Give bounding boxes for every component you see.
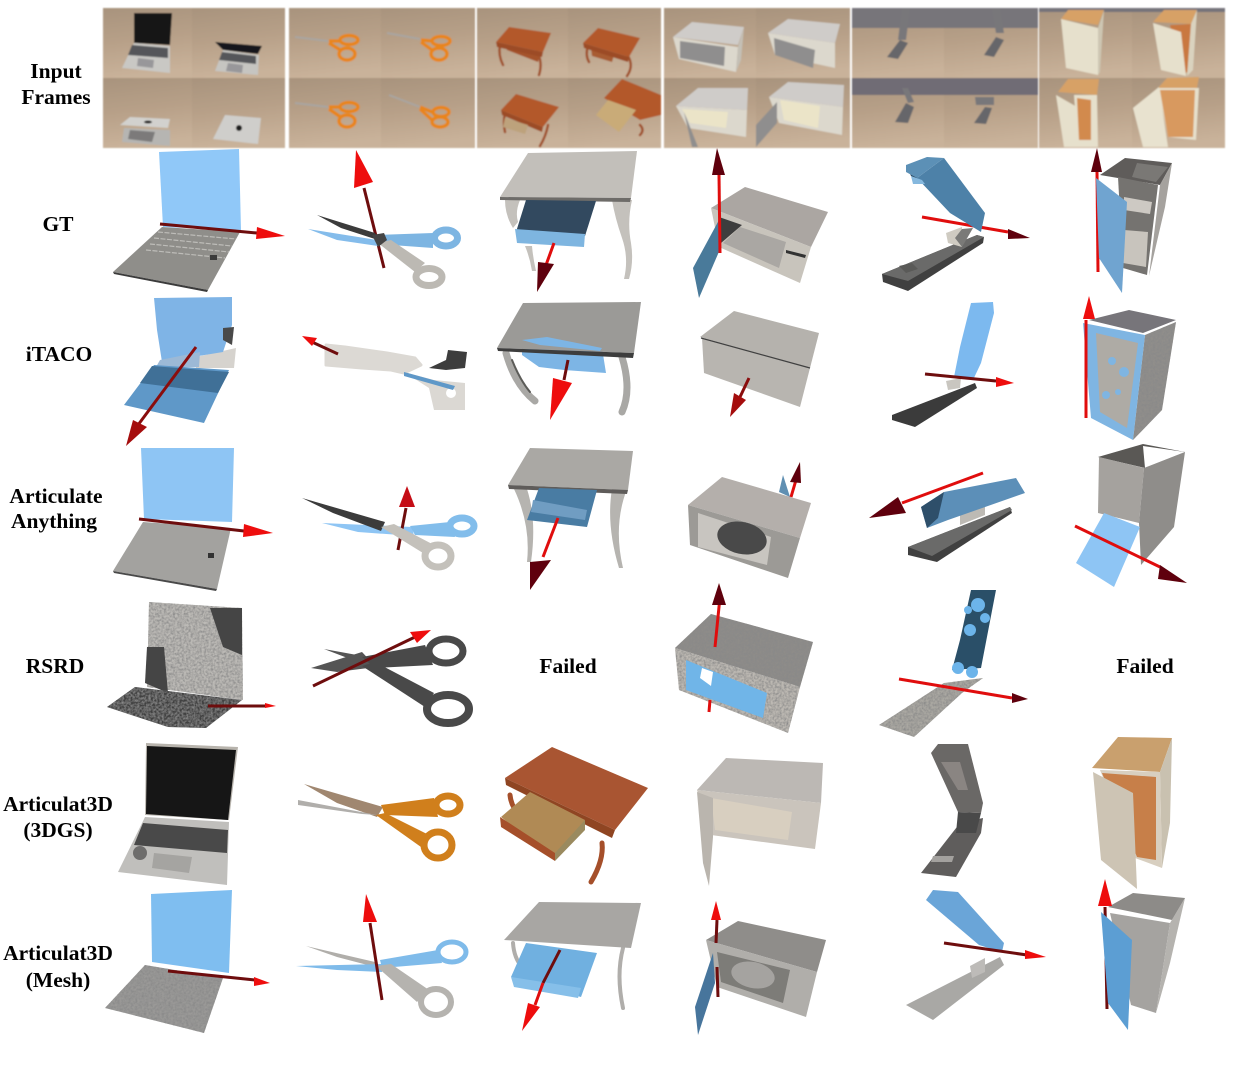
row label: Articulate Anything — [9, 484, 103, 533]
arrow: RSRD stapler axis — [899, 679, 1028, 703]
row label: Articulat3D (Mesh): (Mesh) — [26, 968, 90, 992]
GT row: scissors — [308, 150, 458, 286]
input frames: laptop — [103, 8, 285, 148]
arrow: Articulat3D mesh microwave axis — [711, 901, 721, 997]
row label: Articulat3D (Mesh): Articulat3D — [3, 941, 113, 965]
Articulat3D 3DGS row: laptop — [118, 743, 238, 885]
row label: iTACO: iTACO — [26, 342, 92, 366]
row label: Articulat3D (3DGS) — [3, 792, 113, 842]
Articulate Anything row: cabinet — [1075, 444, 1187, 587]
RSRD row: microwave — [675, 583, 813, 733]
row label: GT: GT — [42, 212, 74, 236]
GT row: desk — [500, 151, 637, 292]
arrow: iTACO microwave axis — [730, 378, 749, 417]
Articulate Anything row: microwave — [688, 462, 811, 578]
row label: Articulate Anything: Articulate — [9, 484, 103, 508]
arrow: Articulat3D mesh laptop axis — [168, 971, 270, 986]
Articulat3D mesh row: microwave — [695, 901, 826, 1035]
arrow: Articulate Anything laptop axis — [139, 519, 273, 537]
arrow: Articulate Anything stapler axis — [869, 473, 983, 518]
iTACO row: microwave — [700, 311, 819, 417]
input frames: cabinet — [1039, 8, 1225, 148]
input frames: scissors — [289, 8, 475, 148]
row label: RSRD: RSRD — [26, 654, 84, 678]
arrow: Articulate Anything scissors axis head — [399, 486, 415, 507]
arrow: Articulat3D mesh cabinet axis head — [1098, 879, 1112, 906]
arrow: GT desk axis — [537, 243, 554, 292]
arrow: RSRD microwave axis — [709, 583, 726, 712]
arrow: GT scissors axis — [354, 150, 373, 188]
arrow: RSRD laptop axis — [208, 703, 276, 708]
input frames: microwave — [664, 8, 850, 148]
iTACO row: stapler — [892, 302, 1014, 427]
Articulat3D mesh row: scissors — [296, 894, 466, 1015]
Articulat3D 3DGS row: desk — [500, 747, 648, 882]
row label: Articulat3D (3DGS): Articulat3D — [3, 792, 113, 816]
arrow: iTACO cabinet axis — [1083, 296, 1095, 418]
Articulat3D mesh row: cabinet — [1098, 879, 1185, 1030]
iTACO row: cabinet — [1083, 296, 1176, 440]
arrow: Articulate Anything cabinet axis — [1075, 526, 1187, 583]
arrow: iTACO stapler axis — [925, 374, 1014, 387]
RSRD row: stapler — [879, 590, 1028, 737]
Articulat3D 3DGS row: cabinet — [1092, 737, 1172, 889]
row label: Articulat3D (3DGS): (3DGS) — [23, 818, 93, 842]
arrow: Articulate Anything desk axis — [530, 518, 558, 590]
row label: Articulate Anything: Anything — [11, 509, 97, 533]
Articulat3D 3DGS row: stapler — [921, 744, 983, 877]
GT row: laptop — [113, 149, 285, 292]
Articulate Anything row: desk — [508, 448, 633, 590]
Articulate Anything row: laptop — [113, 448, 273, 591]
arrow: Articulat3D mesh desk axis — [522, 950, 560, 1031]
arrow: iTACO laptop axis — [126, 347, 196, 446]
input frames: desk — [477, 8, 661, 148]
RSRD row: scissors — [311, 630, 469, 723]
row label: Input Frames — [21, 59, 91, 109]
row label: Input Frames: Frames — [21, 85, 91, 109]
GT row: microwave — [693, 148, 828, 298]
row label: Articulat3D (Mesh) — [3, 941, 113, 992]
GT row: stapler — [882, 157, 1030, 291]
arrow: GT laptop axis — [160, 224, 285, 239]
arrow: Articulat3D mesh scissors axis — [363, 894, 382, 1000]
RSRD row: laptop — [107, 602, 276, 728]
GT row: cabinet — [1091, 148, 1172, 293]
Articulat3D mesh row: desk — [504, 902, 641, 1031]
failed note: RSRD desk: Failed — [539, 654, 597, 678]
Articulat3D mesh row: laptop — [105, 890, 270, 1033]
Articulat3D 3DGS row: microwave — [697, 758, 823, 886]
Articulate Anything row: scissors — [302, 486, 474, 567]
Articulat3D 3DGS row: scissors — [298, 784, 460, 858]
arrow: RSRD scissors axis — [313, 630, 431, 686]
arrow: Articulate Anything microwave axis — [790, 462, 801, 497]
iTACO row: desk — [497, 302, 641, 420]
arrow: GT stapler axis head — [1008, 229, 1030, 239]
iTACO row: scissors — [302, 336, 467, 410]
arrow: Articulat3D mesh stapler axis — [944, 943, 1046, 959]
iTACO row: laptop — [124, 297, 236, 446]
row label: Input Frames: Input — [30, 59, 83, 83]
arrow: GT microwave axis — [712, 148, 725, 253]
arrow: GT cabinet axis head — [1091, 148, 1102, 172]
Articulat3D mesh row: stapler — [906, 890, 1046, 1020]
Articulate Anything row: stapler — [869, 473, 1025, 562]
failed note: RSRD cabinet: Failed — [1116, 654, 1174, 678]
arrow: iTACO desk axis — [550, 360, 572, 420]
input frames: stapler — [852, 8, 1038, 148]
arrow: iTACO scissors axis — [302, 336, 338, 354]
